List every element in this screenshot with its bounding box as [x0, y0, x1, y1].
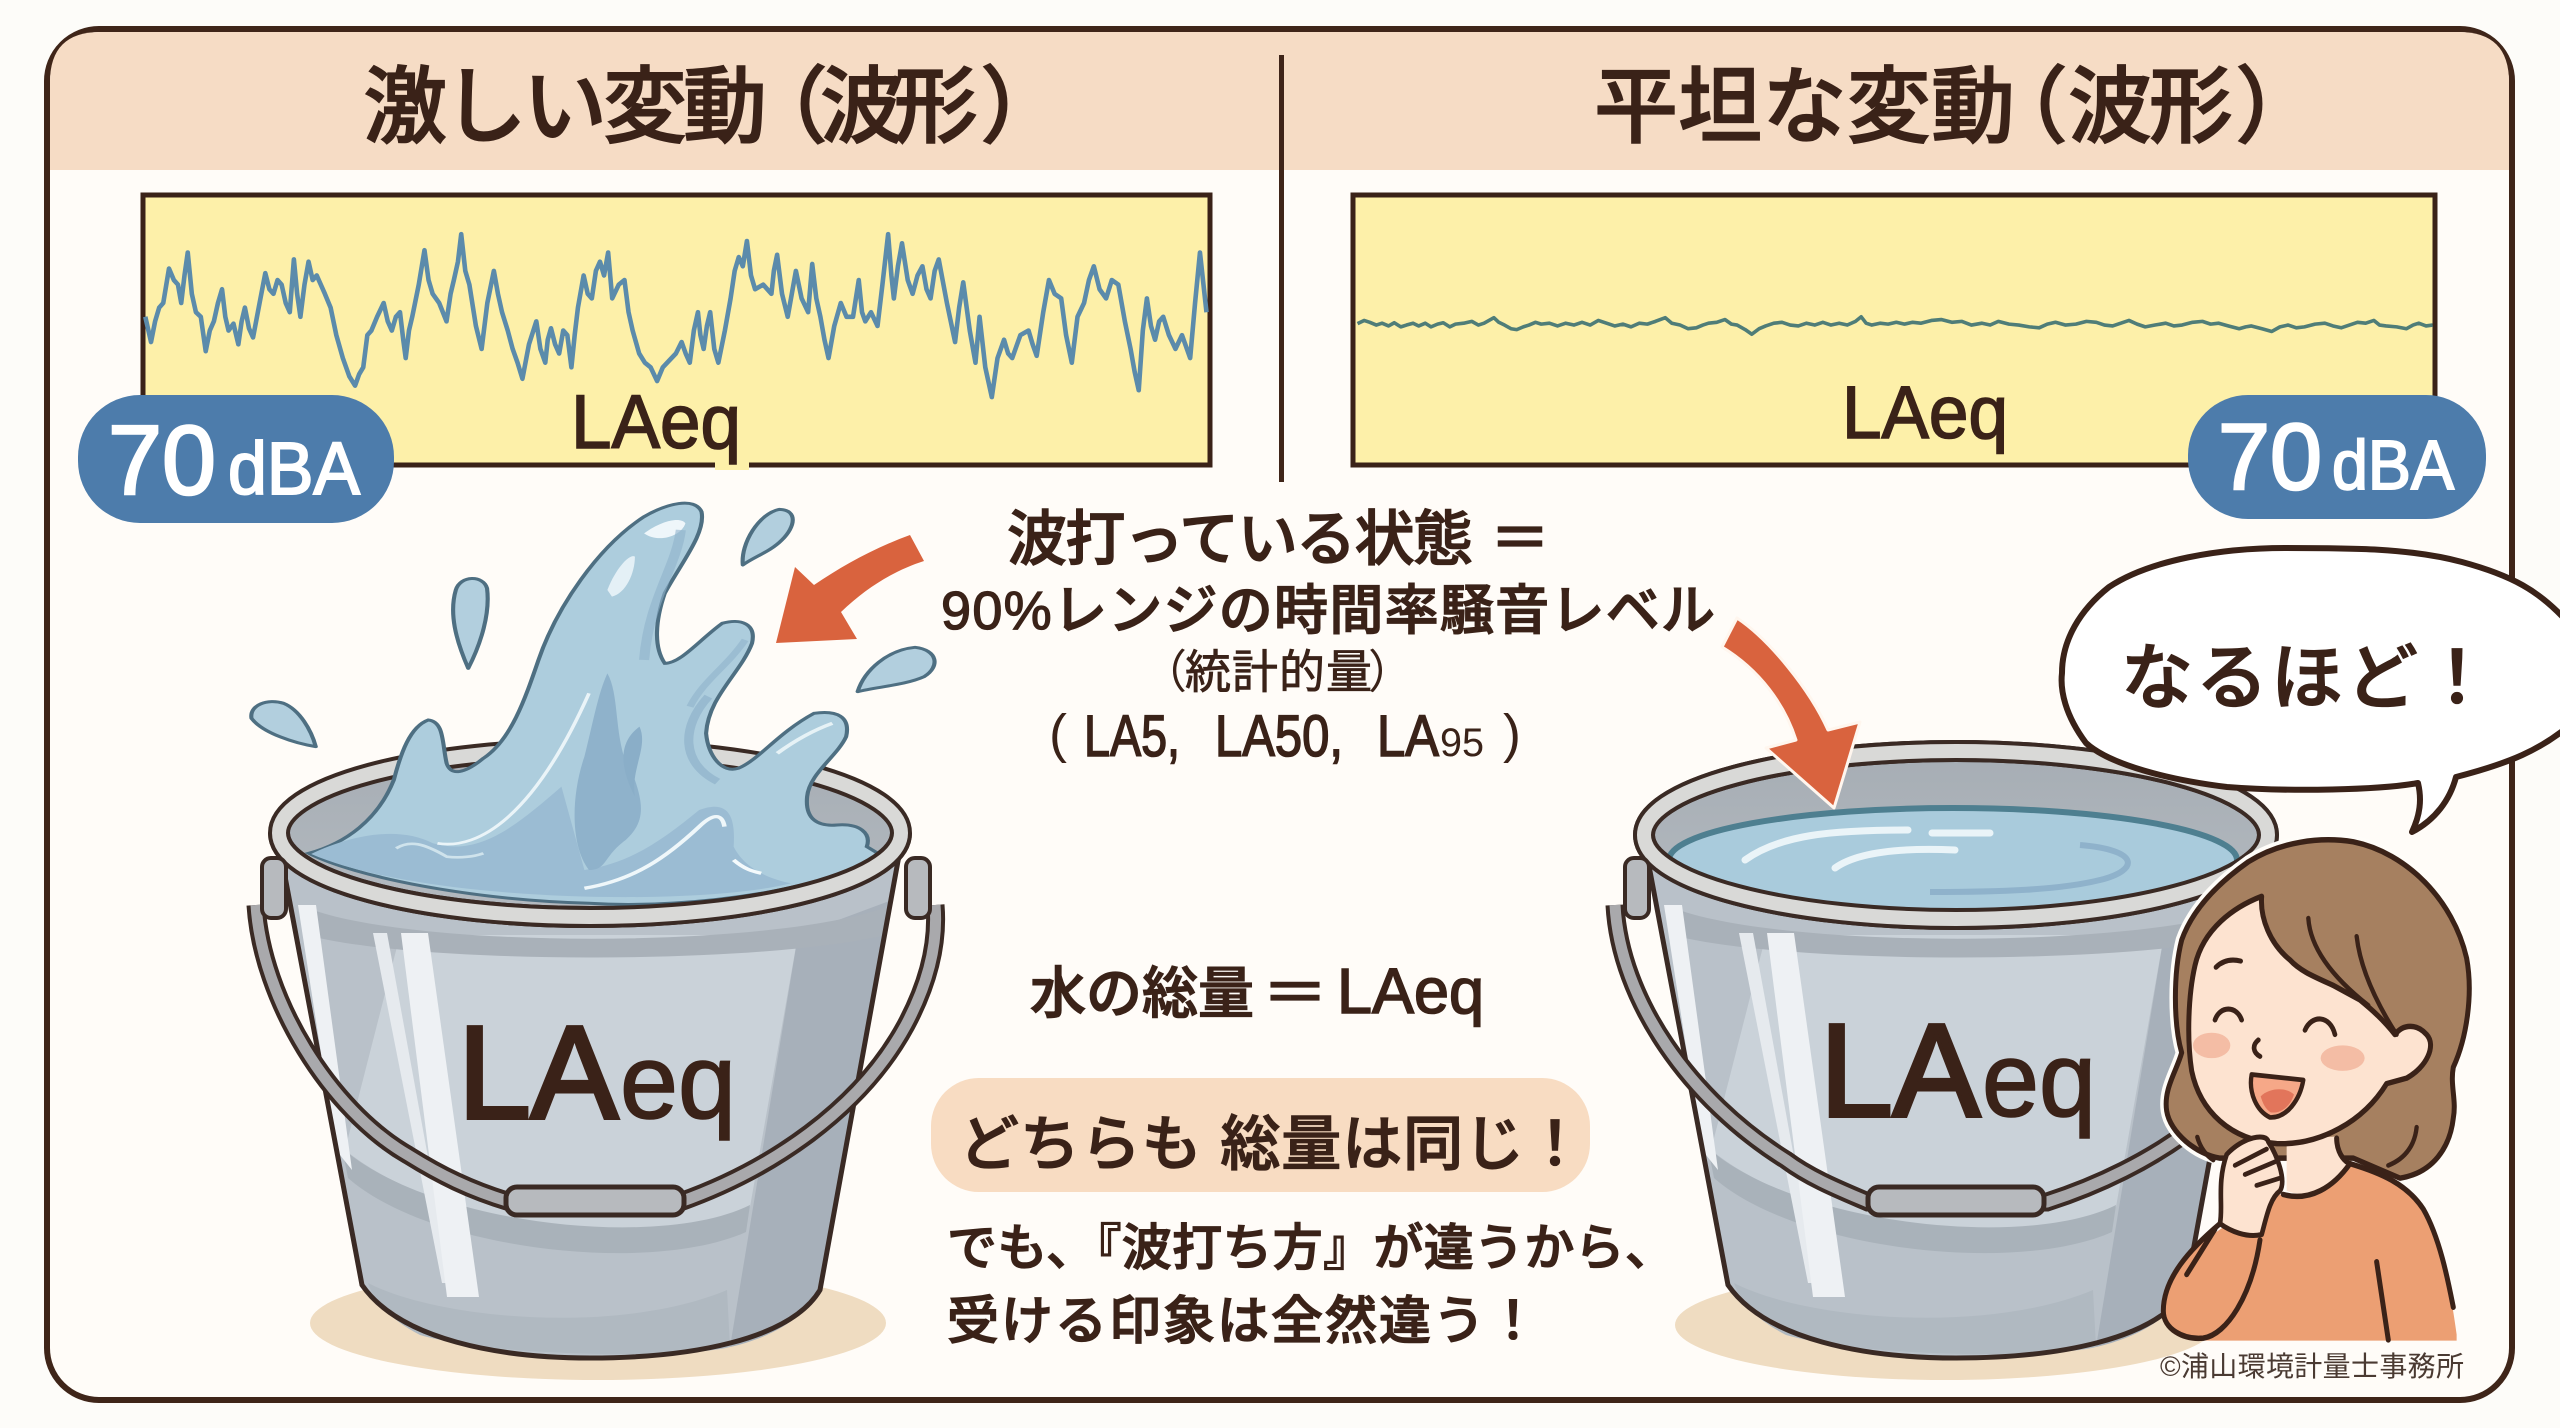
right bucket calm water: [1669, 808, 2237, 912]
text: LA5 LA50 LA95: LA: [1377, 704, 1439, 769]
left bucket label: [458, 999, 736, 1146]
chart: violent fluctuation waveform: [143, 195, 1210, 465]
heading: left: ）: [980, 60, 1064, 154]
bucket: right with calm water: [1615, 751, 2268, 1380]
left bucket front rim: [279, 833, 901, 917]
text: LA5 LA50 LA95: (: [1049, 704, 1067, 764]
bucket: left with splashing water: [251, 503, 936, 1380]
hair outline: [2166, 840, 2469, 1178]
text: LA5 LA50 LA95: [1049, 704, 1521, 769]
chart: flat fluctuation waveform: [1353, 195, 2435, 465]
illustration: woman: [2163, 840, 2469, 1341]
neck: [2287, 1136, 2350, 1194]
right bucket body: [1646, 850, 2266, 1358]
label: LAeq right chart: LAeq: [1842, 371, 2008, 454]
badge: 70dBA right: [2188, 395, 2486, 519]
arrow: orange to still water: [1722, 618, 1860, 808]
label: LAeq left chart: LAeq: [571, 380, 741, 465]
mouth: [2251, 1075, 2303, 1117]
header band: [50, 32, 2509, 170]
fingers: [2235, 1149, 2280, 1185]
text: LA5 LA50 LA95: LA50,: [1215, 704, 1343, 769]
text: wave state: 波打っている状態: [1007, 506, 1473, 573]
left bucket label: LA: [458, 999, 618, 1146]
badge: 70dBA left: dBA: [228, 427, 361, 510]
heading: right: 平坦な変動: [1594, 60, 2015, 154]
text: different impression: [947, 1220, 1675, 1351]
shirt: [2163, 1164, 2457, 1341]
hair: [2166, 840, 2469, 1178]
text: LA5 LA50 LA95: LA5,: [1084, 704, 1180, 769]
text: total water equals LAeq: [1030, 955, 1484, 1027]
heading: left: （: [744, 60, 828, 154]
left bucket handle: [256, 858, 936, 1215]
text: statistical quantity: ）: [1368, 646, 1414, 698]
heading: right: 波形: [2068, 60, 2233, 154]
center divider: [1279, 55, 1284, 482]
shirt outline: [2163, 1164, 2453, 1340]
badge: 70dBA right: 70: [2218, 404, 2322, 509]
left bucket rim: [279, 749, 901, 917]
text: statistical quantity: [1141, 646, 1414, 698]
text: LA5 LA50 LA95: 95: [1440, 721, 1484, 765]
copyright: ©浦山環境計量士事務所: [2160, 1351, 2464, 1382]
text: total water equals LAeq: LAeq: [1337, 955, 1484, 1027]
badge: 70dBA left: [78, 395, 394, 523]
tongue: [2261, 1089, 2294, 1113]
heading: right: ）: [2235, 60, 2319, 154]
text: LA5 LA50 LA95: ): [1503, 704, 1521, 764]
left bucket body: [280, 850, 900, 1358]
right bucket label: eq: [1982, 1021, 2096, 1139]
heading: left: [363, 60, 1064, 154]
right bucket label: [1820, 997, 2096, 1144]
arrow: orange to splash: [776, 535, 924, 643]
callout: same total: どちらも 総量は同じ！: [959, 1111, 1585, 1178]
text: statistical quantity: （: [1141, 646, 1187, 698]
text: total water equals LAeq: ＝: [1262, 962, 1328, 1025]
text: different impression: でも、『波打ち方』が違うから、: [947, 1220, 1675, 1276]
text: different impression: 受ける印象は全然違う！: [947, 1293, 1539, 1351]
text: wave state: ＝: [1490, 506, 1550, 573]
heading: left: 波形: [820, 60, 978, 154]
badge: 70dBA left: 70: [108, 405, 216, 515]
right bucket handle: [1615, 858, 2190, 1215]
left bucket label: eq: [620, 1023, 736, 1141]
speech bubble: なるほど！: [2121, 639, 2493, 719]
heading: left: 激しい変動: [363, 60, 767, 154]
heading: right: [1594, 60, 2319, 154]
shadow under left bucket: [310, 1266, 886, 1380]
speech bubble: [2062, 548, 2560, 832]
heading: right: （: [1984, 60, 2068, 154]
face: [2189, 896, 2431, 1144]
callout: same total: [931, 1078, 1590, 1192]
blush: [2193, 1033, 2365, 1071]
text: 90% range percentile level: 90%レンジの時間率騒音レベル: [941, 581, 1715, 641]
hand: [2220, 1137, 2282, 1235]
collar: [2283, 1138, 2350, 1196]
shadow under right bucket: [1675, 1270, 2215, 1380]
right bucket label: LA: [1820, 997, 1980, 1144]
badge: 70dBA right: dBA: [2332, 426, 2454, 504]
right bucket inner wall: [1644, 751, 2268, 919]
text: total water equals LAeq: 水の総量: [1030, 962, 1254, 1025]
left water splash: [309, 503, 881, 904]
right bucket rim: [1644, 751, 2268, 919]
text: statistical quantity: 統計的量: [1185, 646, 1372, 698]
eyes, brow, nose: [2215, 960, 2335, 1056]
bangs strands: [2197, 918, 2417, 1165]
droplets: [251, 509, 935, 747]
